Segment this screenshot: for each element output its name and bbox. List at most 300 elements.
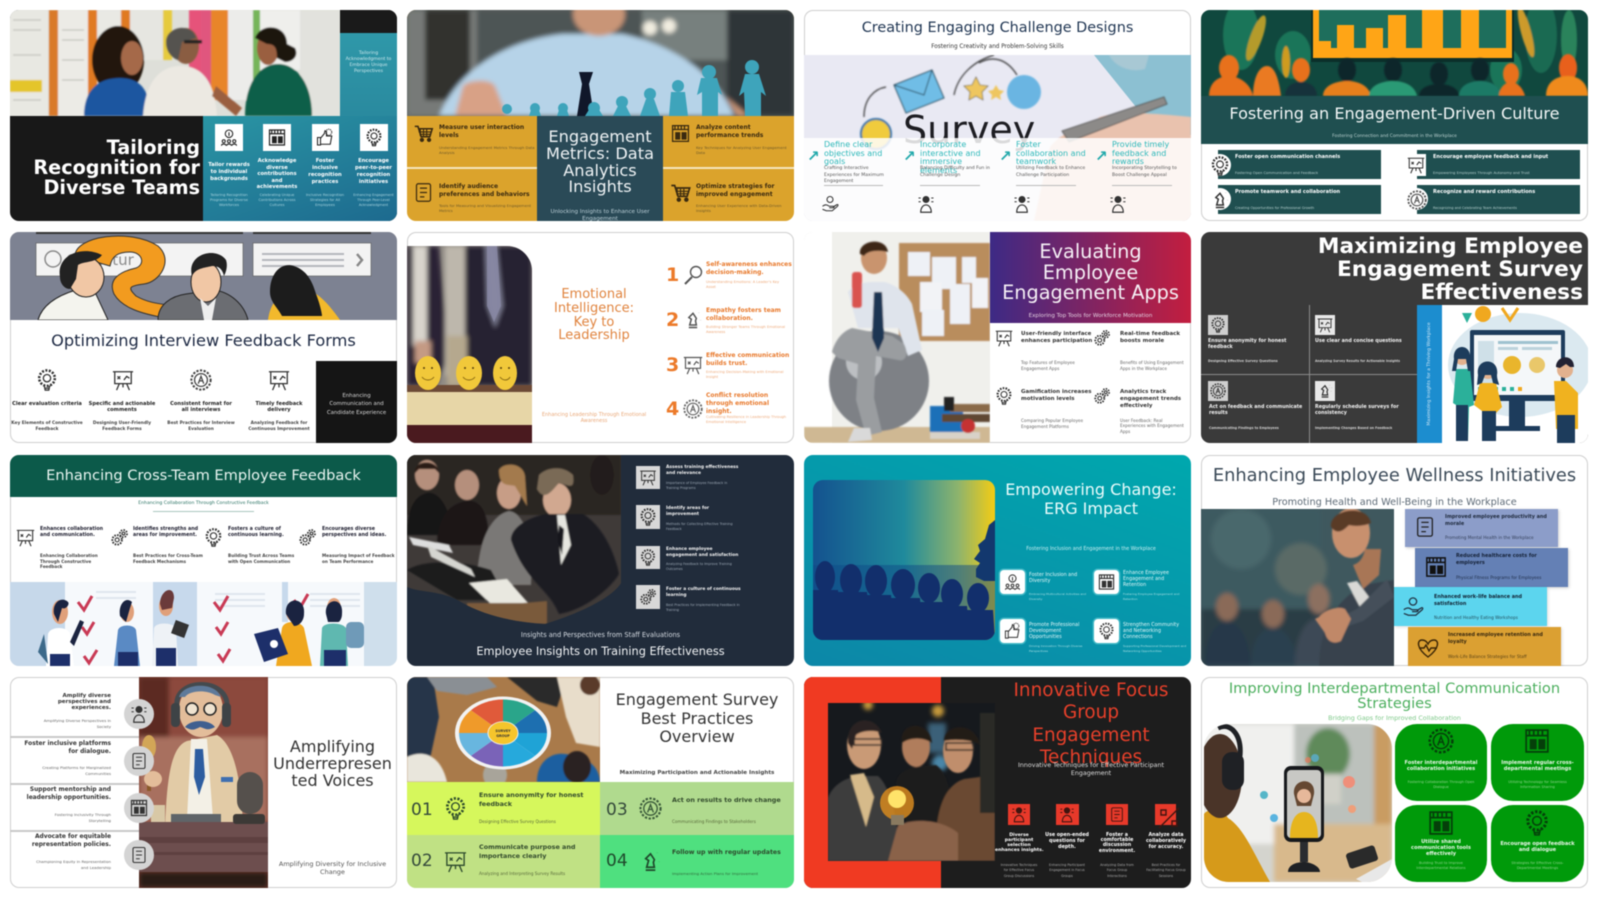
- item 2: for dialogue.: [68, 749, 111, 755]
- item 1 detail: Group Discussions: [1004, 874, 1034, 878]
- subtitle: Fostering Creativity and Problem-Solving Skills: [931, 44, 1064, 50]
- side panel text: Communication and: [329, 401, 384, 407]
- item 2 detail: Awareness: [706, 330, 725, 334]
- photo: video call on phone: [1203, 723, 1393, 883]
- title: Techniques: [1040, 747, 1142, 768]
- icon box 4: [636, 585, 660, 609]
- step 2: interactive and: [920, 148, 981, 158]
- step 4 rule: [1112, 185, 1172, 186]
- item 2: areas for improvement.: [133, 533, 197, 538]
- item 4: [1448, 632, 1543, 646]
- photo: survey page with pen: Survey: [903, 108, 1035, 152]
- feature 2: achievements: [257, 184, 297, 190]
- icon box 4: [1315, 381, 1335, 401]
- item 3: [1209, 405, 1302, 417]
- icon: A gear: [190, 369, 212, 391]
- title: Maximizing Employee: [1318, 234, 1583, 259]
- item 1 detail: Innovative Techniques: [1001, 863, 1037, 867]
- item 2: Engagement and: [1123, 577, 1164, 582]
- title: Employee: [1043, 260, 1138, 284]
- item 4 detail: [1123, 644, 1186, 653]
- item 4: Connections: [1123, 635, 1153, 640]
- feature 1 detail: Programs for Diverse: [210, 198, 248, 202]
- item 4 detail: Insights: [696, 208, 711, 213]
- item 4 detail: Best Practices for: [1152, 863, 1180, 867]
- item 4 detail: Enhancing User Experience with Data-Driven: [696, 203, 782, 208]
- item 4 detail: Continuous Improvement: [248, 427, 310, 432]
- icon 4: [1157, 806, 1173, 823]
- title: Enhancing Employee Wellness Initiatives: [1213, 465, 1576, 486]
- item 4 detail: Training: [666, 608, 679, 612]
- item 1: [10, 693, 111, 712]
- subtitle: Amplifying Diversity for Inclusive: [279, 860, 386, 868]
- panel: top-right black block: [340, 10, 397, 33]
- item 4: loyalty: [1448, 639, 1467, 645]
- item 3 detail: [161, 421, 241, 433]
- title: Enhancing Cross-Team Employee Feedback: [46, 467, 361, 484]
- title: Engagement Survey: [1337, 257, 1583, 282]
- card 2 detail: [1491, 780, 1584, 790]
- icon: trophy: [1109, 194, 1127, 214]
- caption text: Embrace Unique: [349, 63, 388, 68]
- item 4: [239, 401, 319, 414]
- subtitle: Awareness: [581, 418, 607, 424]
- photo: man pointing: [1201, 509, 1394, 666]
- item 3: [1093, 833, 1141, 854]
- feature 4 detail: Acknowledgment: [359, 203, 388, 207]
- title: ERG Impact: [1044, 499, 1138, 518]
- block 03: [600, 782, 794, 835]
- step 3 rule: [1016, 185, 1076, 186]
- photo: group around survey wheel: GROUP: [496, 734, 510, 738]
- icon box: shop: [263, 124, 291, 151]
- box 3: [1218, 185, 1381, 214]
- item 3 detail: Evaluation: [188, 427, 214, 432]
- item 3 detail: [666, 562, 732, 572]
- item 4 detail: Championing Equity in Representation: [36, 859, 111, 864]
- photo: clay figure at microphone: [139, 677, 268, 888]
- feature 3: recognition: [308, 172, 342, 178]
- number 3: 3: [666, 354, 679, 376]
- block 04: [600, 835, 794, 888]
- item 3: leadership opportunities.: [27, 795, 111, 801]
- box 2: [1417, 150, 1580, 179]
- item 1 detail: Understanding Engagement Metrics Through Data: [439, 145, 535, 150]
- item 4: Foster a culture of continuous: [666, 587, 741, 592]
- subtitle: Enhancing Collaboration Through Constructive Feedback: [138, 501, 269, 506]
- icon 2: [1059, 806, 1075, 823]
- item 3: [228, 527, 284, 539]
- icon: bulb: [366, 128, 382, 148]
- item 2: Identifies strengths and: [133, 527, 198, 532]
- item 3 detail: [1029, 644, 1082, 653]
- item 1: [438, 124, 524, 139]
- number 03: 03: [606, 800, 628, 820]
- item 2 detail: Communities: [85, 771, 111, 776]
- subtitle: [268, 860, 397, 876]
- item 4: effectively: [1120, 403, 1152, 409]
- feature 1: [208, 161, 250, 182]
- item 3: [696, 124, 764, 139]
- card 1 text: Foster interdepartmental: [1405, 760, 1477, 766]
- item 3 detail: with Open Communication: [228, 559, 290, 564]
- item 4: consistency: [1315, 411, 1347, 416]
- item 2 detail: [666, 522, 733, 532]
- title: Evaluating: [1039, 240, 1142, 263]
- photo: man on exercise ball: [804, 232, 990, 443]
- card 4 detail: Departmental Meetings: [1517, 866, 1558, 870]
- feature 1 detail: [210, 193, 248, 207]
- step 2 rule: [920, 185, 980, 186]
- item 2 detail: Feedback Mechanisms: [133, 559, 186, 564]
- icon box 1: [1000, 570, 1025, 594]
- icon 4: [1098, 622, 1115, 640]
- item 3 detail: Outcomes: [666, 567, 683, 571]
- item 2 detail: Building Stronger Teams Through Emotional: [706, 325, 785, 329]
- item 3 detail: Interactions: [1107, 874, 1127, 878]
- icon: chess: [1210, 190, 1230, 210]
- icon: hand: [822, 195, 840, 212]
- subtitle: Unlocking Insights to Enhance User: [550, 209, 650, 215]
- item 3: [706, 352, 789, 368]
- item 4: improved engagement: [696, 191, 773, 198]
- item 3: Foster a: [1106, 833, 1128, 838]
- item 4: [1120, 389, 1181, 410]
- item 4 detail: Apps: [1120, 429, 1130, 434]
- feature 4: peer-to-peer: [355, 165, 392, 171]
- icon 4: [1317, 383, 1333, 399]
- icon: bulb team: [220, 128, 238, 146]
- caption text: Tailoring: [359, 51, 378, 56]
- title: Innovative Focus: [1013, 680, 1169, 701]
- title: Employee Insights on Training Effectiveness: [476, 645, 725, 658]
- caption text: Perspectives: [354, 69, 383, 74]
- feature 1 detail: Tailoring Recognition: [210, 193, 248, 197]
- item 4: Analyze data: [1148, 833, 1184, 838]
- item 2: Use clear and concise questions: [1315, 339, 1402, 344]
- feature 4 detail: Enhancing Engagement: [353, 193, 394, 197]
- item 4 detail: [696, 203, 782, 213]
- title: [546, 127, 654, 196]
- title: Leadership: [558, 328, 630, 343]
- title: Fostering an Engagement-Driven Culture: [1229, 104, 1560, 123]
- icon 3: [639, 549, 657, 566]
- item 1 detail: Society: [97, 724, 111, 729]
- circle 4: [124, 840, 154, 870]
- item 4: Conflict resolution: [706, 392, 768, 399]
- icon: gears: [1093, 329, 1111, 347]
- item 1: User-friendly interface: [1021, 331, 1091, 337]
- card 3 detail: Interdepartmental Relations: [1416, 866, 1466, 870]
- card 4 text: Encourage open feedback: [1500, 841, 1575, 847]
- icon 1: [639, 469, 657, 486]
- card 2 detail: Information Sharing: [1520, 785, 1555, 789]
- item 4 detail: [1120, 418, 1184, 434]
- icon: gear bulb: [444, 797, 467, 820]
- item 3 detail: [706, 370, 783, 380]
- subtitle rule: [153, 511, 254, 512]
- step 4: [1112, 141, 1169, 166]
- step 4: rewards: [1112, 157, 1144, 166]
- icon: gears: [110, 528, 129, 547]
- item 2: Foster inclusive platforms: [24, 741, 111, 747]
- item 4 detail: Supporting Professional Development and: [1123, 644, 1186, 648]
- subtitle: [995, 762, 1187, 777]
- step 1 detail: Crafting Interactive: [824, 166, 869, 171]
- item 1: decision-making.: [706, 269, 764, 276]
- icon box 3: [636, 546, 660, 569]
- title: Key to: [574, 315, 614, 330]
- item 4: for accuracy.: [1149, 845, 1183, 850]
- item 4: delivery: [267, 407, 291, 413]
- illustration: silhouettes with gradient: [812, 479, 996, 640]
- item 3 detail: Comparing Popular Employee: [1021, 418, 1083, 423]
- subtitle: Fostering Inclusion and Engagement in the Workplace: [1026, 547, 1156, 552]
- item 2: [706, 307, 781, 323]
- step 3: teamwork: [1016, 157, 1056, 166]
- panel: Creating Engaging Challenge Designs: [804, 10, 1191, 221]
- item 2 detail: [438, 203, 532, 213]
- item 1: [706, 261, 792, 277]
- icon: barbell: [918, 195, 934, 214]
- item 3: builds trust.: [706, 360, 747, 367]
- red icon 2: [1056, 804, 1079, 825]
- item 4 detail: [666, 603, 740, 613]
- item 1: Foster Inclusion and: [1029, 573, 1077, 578]
- icon: hand coin: [1401, 596, 1425, 618]
- item 3: Support mentorship and: [30, 787, 111, 793]
- header band: [10, 455, 397, 497]
- title: Creating Engaging Challenge Designs: [862, 20, 1133, 36]
- item 3 detail: Best Practices for Interview: [167, 421, 235, 426]
- item 2 detail: [1120, 360, 1184, 372]
- item 4 detail: Facilitating Focus Group: [1146, 868, 1186, 872]
- icon: gear bulb: [995, 387, 1013, 405]
- panel: Improving Interdepartmental Communication Strategies: [1201, 677, 1588, 888]
- panel: Tailoring Recognition for Diverse Teams: [10, 10, 397, 221]
- card 1 detail: [1395, 780, 1487, 790]
- step 2 detail: Challenge Design: [920, 173, 960, 178]
- step 1 rule: [824, 185, 883, 186]
- card 3 text: effectively: [1426, 851, 1456, 857]
- bar 4: [1408, 627, 1561, 666]
- red icon 3: [1106, 804, 1128, 825]
- item 2: improvement: [666, 512, 699, 517]
- item 3 detail: Enhancing Decision-Making with Emotional: [706, 370, 783, 374]
- number 1: 1: [666, 264, 679, 286]
- icon 2: [1098, 573, 1115, 591]
- icon box 2: [1094, 570, 1119, 594]
- panel: Employee Insights on Training Effectiveness: [407, 455, 794, 666]
- item 1: Measure user interaction: [439, 124, 524, 131]
- title: Overview: [659, 727, 735, 746]
- item 4 detail: Measuring Impact of Feedback: [322, 553, 395, 558]
- card 2 text: departmental meetings: [1504, 766, 1571, 772]
- item 4: Strengthen Community: [1123, 623, 1179, 628]
- item 3 detail: Driving Innovation Through Diverse: [1029, 644, 1082, 648]
- item 3: continuous learning.: [228, 533, 284, 538]
- item 02: [479, 843, 575, 861]
- bar 2: [1415, 548, 1568, 587]
- photo: three colleagues at a planning wall: [9, 9, 341, 117]
- panel: slate title area: [537, 116, 663, 221]
- feature 4: Encourage: [358, 158, 389, 164]
- number 04: 04: [606, 851, 628, 871]
- item 4 detail: on Team Performance: [322, 559, 373, 564]
- title: [33, 136, 201, 199]
- item 3 detail: [10, 812, 111, 825]
- item 1 detail: Key Elements of Constructive: [11, 421, 83, 426]
- caption text: [345, 50, 392, 74]
- item 2: [666, 506, 709, 518]
- item 2: [10, 741, 111, 756]
- feature 4: [354, 157, 392, 185]
- illustration: audience and bar chart: [1201, 10, 1588, 96]
- box 4: [1417, 185, 1580, 214]
- illustration: team with checklists: [10, 582, 397, 666]
- item 1 detail: Designing Effective Survey Questions: [1208, 359, 1278, 363]
- photo: survey page with pen: [804, 54, 1192, 220]
- panel: Evaluating Employee Engagement Apps: [804, 232, 1191, 443]
- panel: Emotional Intelligence: [407, 232, 794, 443]
- item 1 detail: [1029, 592, 1086, 601]
- item 1: experiences.: [71, 705, 111, 711]
- photo: man placing figure bars: [406, 9, 795, 117]
- feature 2 detail: Contributions Across: [258, 198, 296, 202]
- icon box: bulb team: [215, 124, 243, 151]
- item 1 detail: Amplifying Diverse Perspectives in: [44, 718, 111, 723]
- item 3: Fosters a culture of: [228, 527, 281, 532]
- item 4 detail: Analyzing Feedback for: [251, 421, 307, 426]
- item 4: representation policies.: [32, 842, 111, 848]
- red block: [804, 677, 941, 888]
- title: [990, 242, 1191, 304]
- illustration: interview scene: [10, 232, 397, 320]
- item 4 detail: Best Practices for Implementing Feedback in: [666, 603, 740, 607]
- item 2: Retention: [1123, 583, 1146, 588]
- card 4: [1491, 805, 1584, 882]
- item 4: Advocate for equitable: [35, 834, 111, 840]
- icon: board backing: [1406, 154, 1426, 176]
- box 1 detail: Fostering Open Communication and Feedback: [1235, 171, 1318, 175]
- item 4: [1123, 623, 1179, 642]
- icon: board: [1407, 155, 1425, 175]
- item 2 detail: Designing User-Friendly: [93, 421, 151, 426]
- item 3: Enhance employee: [666, 547, 712, 552]
- item 2: Real-time feedback: [1120, 331, 1180, 337]
- item 4: insight.: [706, 408, 732, 415]
- vertical bar text: Maximizing Insights for a Thriving Workplace: [1426, 322, 1432, 426]
- item 1: Improved employee productivity and: [1445, 514, 1547, 520]
- card 1 detail: Fostering Collaboration Through Open: [1408, 780, 1474, 784]
- step 1: [824, 140, 882, 166]
- number 01: 01: [411, 800, 433, 820]
- subtitle: Exploring Top Tools for Workforce Motivation: [1029, 313, 1152, 319]
- item 1: Clear evaluation criteria: [12, 401, 82, 407]
- item 03: Act on results to drive change: [672, 796, 781, 804]
- card 2 text: [1491, 760, 1584, 773]
- item 3: Act on feedback and communicate: [1209, 405, 1302, 410]
- item 3 detail: Nutrition and Healthy Eating Workshops: [1434, 615, 1518, 620]
- bar 3: [1394, 587, 1547, 626]
- arrow 1: ↗: [807, 147, 820, 165]
- number 2: 2: [666, 309, 679, 331]
- item 1 detail: [1021, 360, 1075, 372]
- icon: shop: [268, 128, 286, 146]
- icon 3: [1004, 622, 1021, 640]
- icon: chart board: [268, 369, 290, 391]
- title: Empowering Change:: [1005, 480, 1177, 499]
- item 1 detail: Importance of Employee Feedback in: [666, 481, 727, 485]
- feature 1: backgrounds: [210, 176, 248, 182]
- item 04 detail: Implementing Action Plans for Improvement: [672, 871, 758, 876]
- item 1 detail: Diversity: [1029, 597, 1042, 601]
- item 2 detail: Methods for Collecting Effective Training: [666, 522, 733, 526]
- title: [600, 691, 794, 747]
- item 1 detail: Engagement Apps: [1021, 366, 1059, 371]
- feature 2: contributions: [257, 171, 297, 177]
- item 1 detail: [706, 280, 779, 290]
- icon: gear bulb backing: [1209, 154, 1231, 176]
- card 4 detail: [1491, 861, 1584, 871]
- item 1: and relevance: [666, 471, 701, 476]
- arrow 3: ↗: [999, 147, 1012, 165]
- item 1: [1021, 331, 1092, 345]
- item 1 detail: Feedback: [40, 564, 62, 569]
- item 4 detail: [239, 421, 319, 433]
- item 01: [479, 791, 583, 809]
- subtitle: [550, 208, 650, 222]
- icon: gear bulb: [204, 528, 223, 547]
- item 1 detail: for Effective Focus: [1004, 868, 1034, 872]
- item 2 detail: Creating Platforms for Marginalized: [42, 765, 111, 770]
- item 1: [666, 465, 738, 477]
- icon: shop: [1524, 728, 1550, 754]
- icon: thumb: [316, 128, 333, 146]
- item 3: [10, 787, 111, 802]
- icon box 3: [1208, 381, 1228, 401]
- item 2 detail: [1043, 863, 1091, 879]
- bar 1: [1405, 509, 1558, 547]
- feature 3 detail: Employees: [315, 203, 335, 207]
- item 4: engagement trends: [1120, 396, 1181, 402]
- item 3: Analyze content: [696, 124, 751, 131]
- title: Effectiveness: [1420, 280, 1583, 305]
- item 2 detail: Fostering Employee Engagement and: [1123, 592, 1179, 596]
- number 02: 02: [411, 851, 433, 871]
- step 1 detail: Engagement: [824, 179, 853, 184]
- item 2 detail: Metrics: [439, 208, 453, 213]
- item 2 detail: Feedback: [666, 527, 682, 531]
- item 4 detail: Experiences with Engagement: [1120, 423, 1184, 428]
- icon box 3: [1000, 619, 1025, 643]
- subtitle: Enhancing Leadership Through Emotional: [542, 412, 646, 418]
- item 3: Promote Professional: [1029, 623, 1079, 628]
- title: [1201, 235, 1583, 304]
- circle 2: [124, 746, 154, 776]
- item 4 detail: [10, 859, 111, 872]
- item 1: perspectives and: [58, 699, 111, 705]
- photo: seated staff in training: [406, 454, 622, 624]
- icon box 1: [1208, 315, 1228, 335]
- item 4: through emotional: [706, 400, 769, 407]
- item 1: enhances insights.: [995, 848, 1044, 853]
- item 3: results: [1209, 411, 1228, 416]
- item 4: Increased employee retention and: [1448, 632, 1543, 638]
- step 2: immersive: [920, 157, 962, 166]
- icon box 4: [1094, 619, 1119, 643]
- item 2 detail: Analyzing Survey Results for Actionable Insights: [1315, 359, 1400, 363]
